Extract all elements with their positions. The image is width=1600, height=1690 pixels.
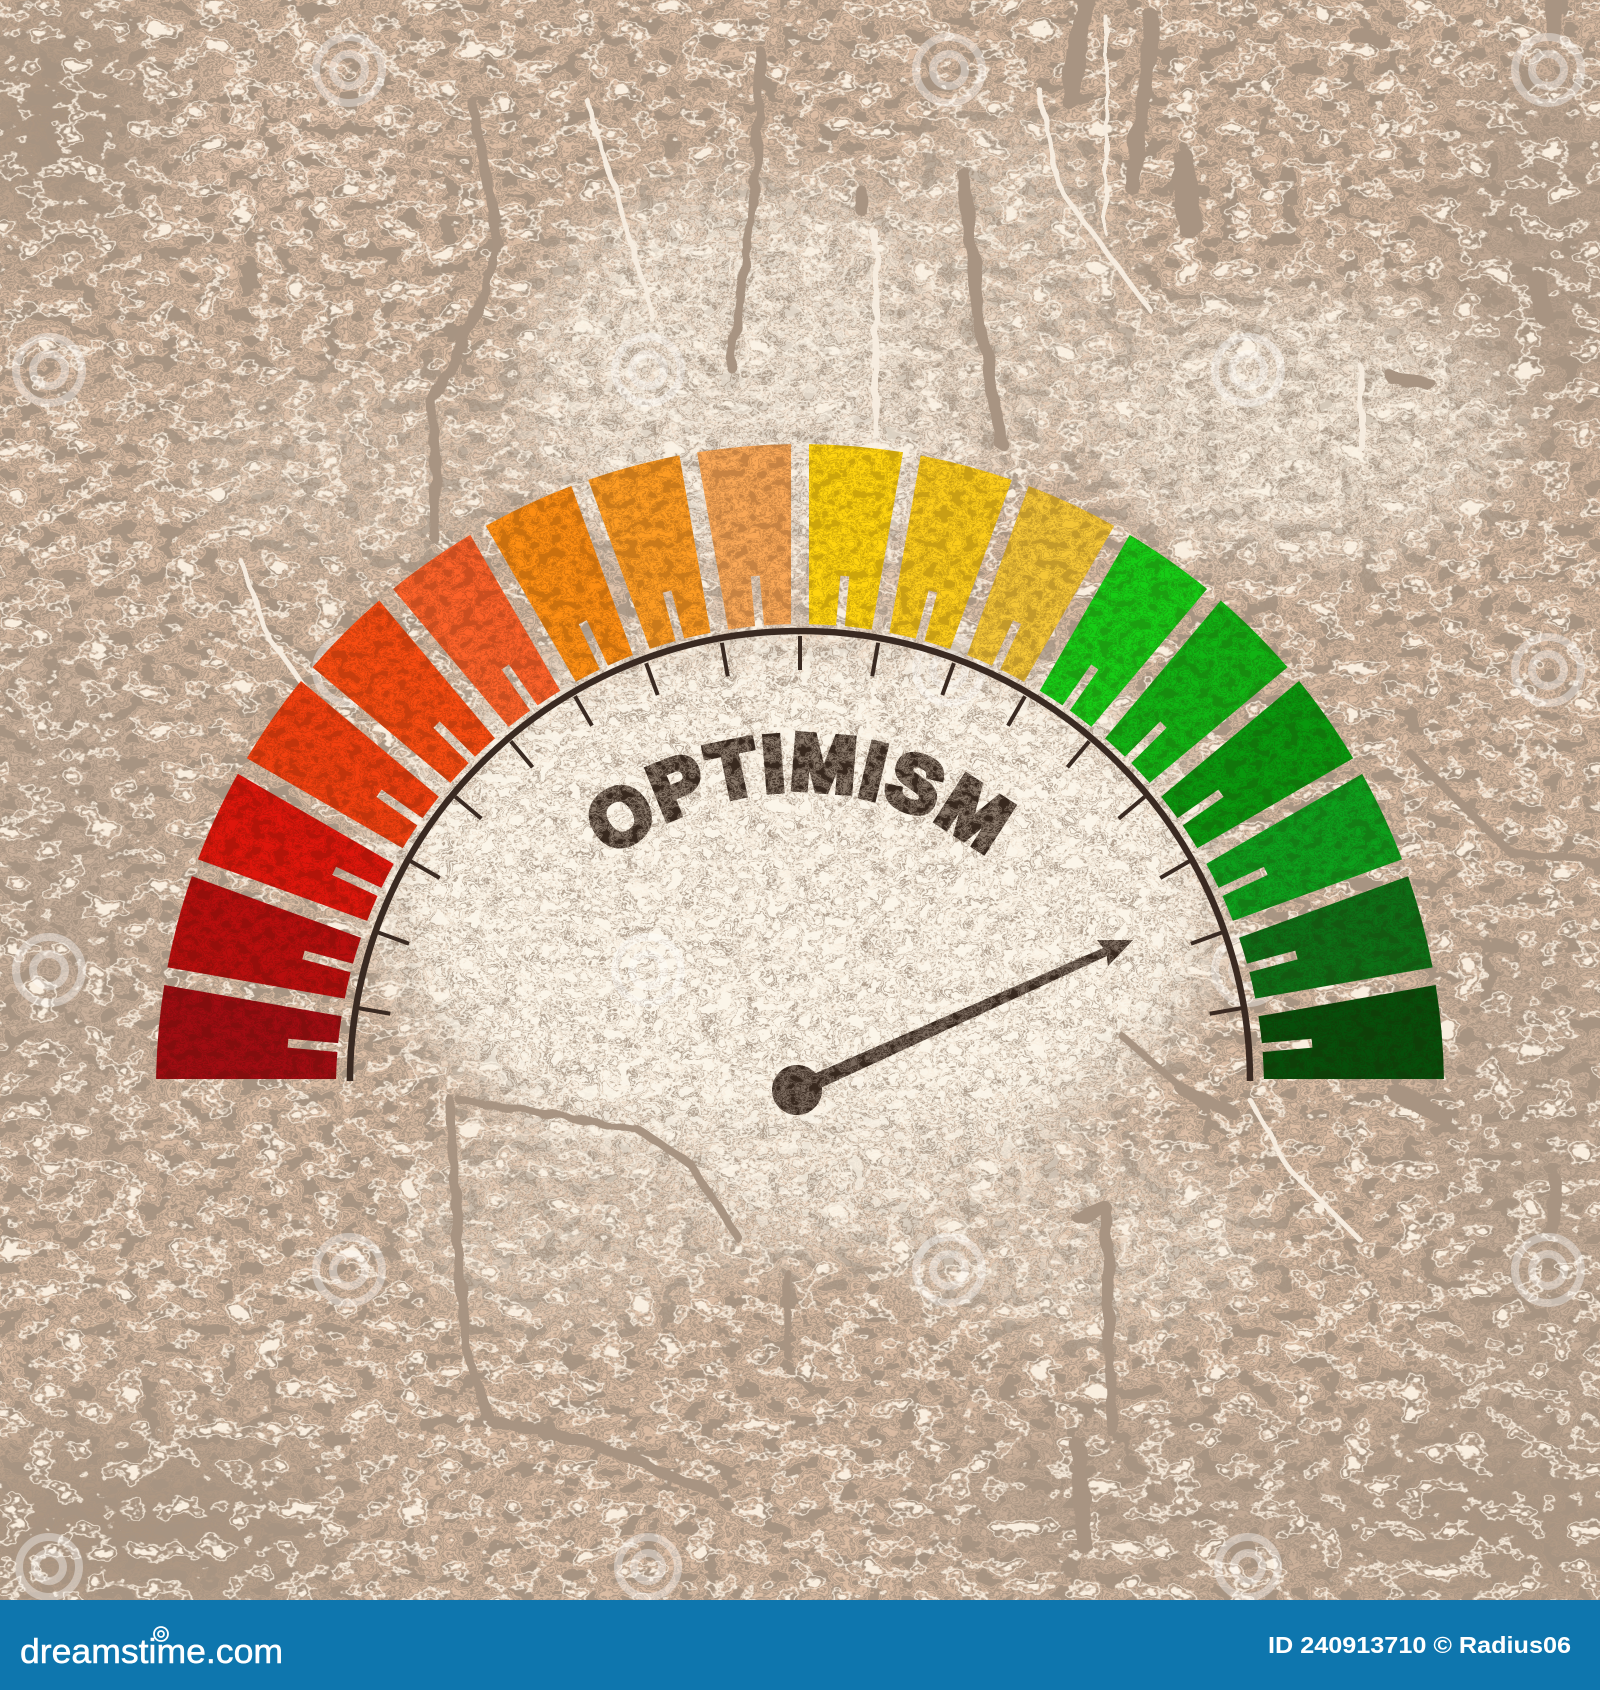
segment 8 orange bbox=[588, 448, 740, 654]
segment 1 dark red bbox=[156, 985, 342, 1079]
rock cracks bbox=[431, 0, 1600, 1547]
segment 13 bright green bbox=[1037, 535, 1211, 743]
footer bar bbox=[0, 1600, 1600, 1690]
needle pointer bbox=[794, 940, 1133, 1097]
segment 5 red orange bbox=[313, 595, 515, 786]
segment 18 darkest green bbox=[1253, 985, 1452, 1110]
segment 9 light orange bbox=[697, 436, 822, 635]
logo spiral bbox=[154, 1627, 168, 1641]
segment 14 green bbox=[1102, 601, 1293, 803]
segment 7 orange bbox=[486, 479, 660, 687]
gauge colour segments bbox=[156, 436, 1452, 1110]
scale arc and tick marks bbox=[350, 631, 1250, 1081]
segment 4 red orange bbox=[247, 677, 455, 851]
pale stone veins bbox=[240, 17, 1361, 1240]
segment 10 yellow bbox=[809, 444, 903, 630]
segment 12 yellow bbox=[965, 486, 1117, 692]
segment 6 orange red bbox=[393, 529, 584, 731]
segment 17 dark green bbox=[1234, 876, 1440, 1028]
needle hub bbox=[772, 1065, 822, 1115]
segment 3 bright red bbox=[198, 771, 404, 923]
segment 15 green bbox=[1157, 681, 1359, 872]
needle with hub bbox=[772, 940, 1133, 1115]
footer credit: ID 240913710 © Radius06 bbox=[1268, 1632, 1571, 1658]
segment 16 green bbox=[1201, 774, 1409, 948]
segment 11 yellow bbox=[888, 455, 1013, 654]
gauge title: OPTIMISM: OPTIMISM bbox=[588, 730, 1018, 856]
segment 2 red bbox=[167, 875, 366, 1000]
footer logo: dreamstime.com: dreamstime.com bbox=[20, 1633, 283, 1671]
